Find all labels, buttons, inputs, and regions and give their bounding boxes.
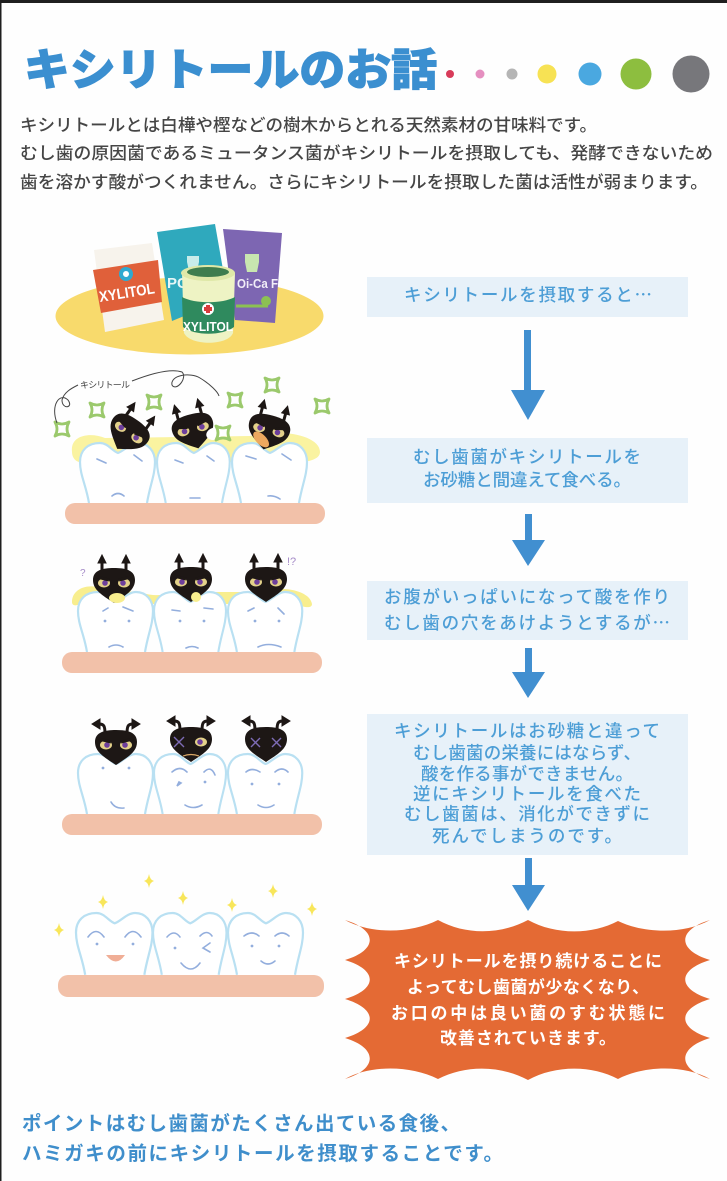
package: red xylitol: XYLITOL [98, 280, 156, 306]
illustration: germs try to make acid [62, 554, 322, 673]
jar: xylitol bottle: XYLITOL [183, 319, 233, 334]
step 4 box: 酸を作る事ができません。 [421, 764, 633, 784]
step 2 box: むし歯菌がキシリトールを [413, 447, 641, 467]
package: purple: Oi-Ca F [237, 276, 278, 291]
illustration: xylitol products on yellow plate [56, 224, 324, 354]
decorative colour dots [446, 56, 710, 92]
step 4 box [367, 714, 688, 855]
step 4 box: キシリトールはお砂糖と違って [394, 721, 660, 741]
tooth faces [102, 767, 288, 808]
gum [65, 503, 325, 524]
step 3 box [367, 581, 688, 640]
xylitol squiggle and label [55, 371, 219, 423]
mouth: happy [106, 955, 125, 962]
step 3 box: お腹がいっぱいになって酸を作り [384, 587, 670, 607]
package: teal: PC [167, 275, 188, 292]
title: キシリトールのお話 [24, 46, 437, 95]
xylitol squiggle and label: キシリトール [80, 380, 130, 390]
orange burst callout: よってむし歯菌が少なくなり、 [407, 977, 649, 997]
step 4 box: 逆にキシリトールを食べた [413, 784, 641, 804]
intro text: キシリトールとは白樺や樫などの樹木からとれる天然素材の甘味料です。 [20, 115, 597, 135]
bottom point note: ハミガキの前にキシリトールを摂取することです。 [22, 1143, 503, 1165]
step 2 box [367, 438, 688, 503]
orange burst callout: キシリトールを摂り続けることに [394, 952, 662, 971]
plaque [72, 433, 320, 462]
step 4 box: むし歯菌は、消化ができずに [404, 804, 650, 824]
question marks: !? [287, 556, 296, 568]
gum [62, 652, 322, 673]
step 1 box [367, 277, 688, 317]
germs [100, 395, 296, 461]
intro text: 歯を溶かす酸がつくれません。さらにキシリトールを摂取した菌は活性が弱まります。 [20, 172, 708, 192]
bottom point note: ポイントはむし歯菌がたくさん出ている食後、 [22, 1112, 460, 1135]
arrow [512, 648, 545, 698]
tooth faces [97, 454, 291, 499]
teeth [78, 592, 302, 652]
orange burst callout: 改善されていきます。 [440, 1028, 616, 1048]
tooth faces [88, 932, 289, 969]
yellow sparkles [54, 874, 317, 937]
bottom point note [22, 1112, 503, 1165]
step 3 box: むし歯の穴をあけようとするが… [384, 610, 670, 635]
illustration: healthy teeth [54, 874, 324, 997]
arrow [512, 514, 545, 566]
plaque [72, 586, 312, 607]
question marks [80, 556, 296, 579]
package: red xylitol [93, 243, 164, 332]
step 2 box: お砂糖と間違えて食べる。 [423, 470, 631, 490]
orange burst callout: お口の中は良い菌のすむ状態に [391, 1004, 665, 1023]
step 1 box: キシリトールを摂取すると… [404, 282, 652, 307]
step 4 box: むし歯菌の栄養にはならず、 [413, 743, 641, 763]
gum [58, 975, 324, 997]
package: purple [223, 229, 282, 323]
question marks: ? [80, 568, 86, 579]
teeth [80, 443, 307, 503]
teeth [78, 754, 302, 814]
jar: xylitol bottle [181, 265, 235, 343]
intro text: むし歯の原因菌であるミュータンス菌がキシリトールを摂取しても、発酵できないため [20, 143, 713, 163]
teeth [76, 913, 303, 975]
gum [62, 814, 322, 835]
arrow [512, 858, 545, 911]
illustration: germs eat xylitol [55, 371, 329, 524]
tooth faces [103, 607, 284, 648]
orange burst callout [345, 920, 710, 1080]
germs [92, 716, 290, 765]
arrow [511, 330, 545, 420]
intro text [20, 115, 713, 192]
green sparkles [55, 378, 329, 440]
illustration: germs weaken [62, 716, 322, 835]
germs [93, 554, 287, 603]
step 4 box: 死んでしまうのです。 [432, 826, 622, 846]
package: teal [157, 224, 228, 321]
